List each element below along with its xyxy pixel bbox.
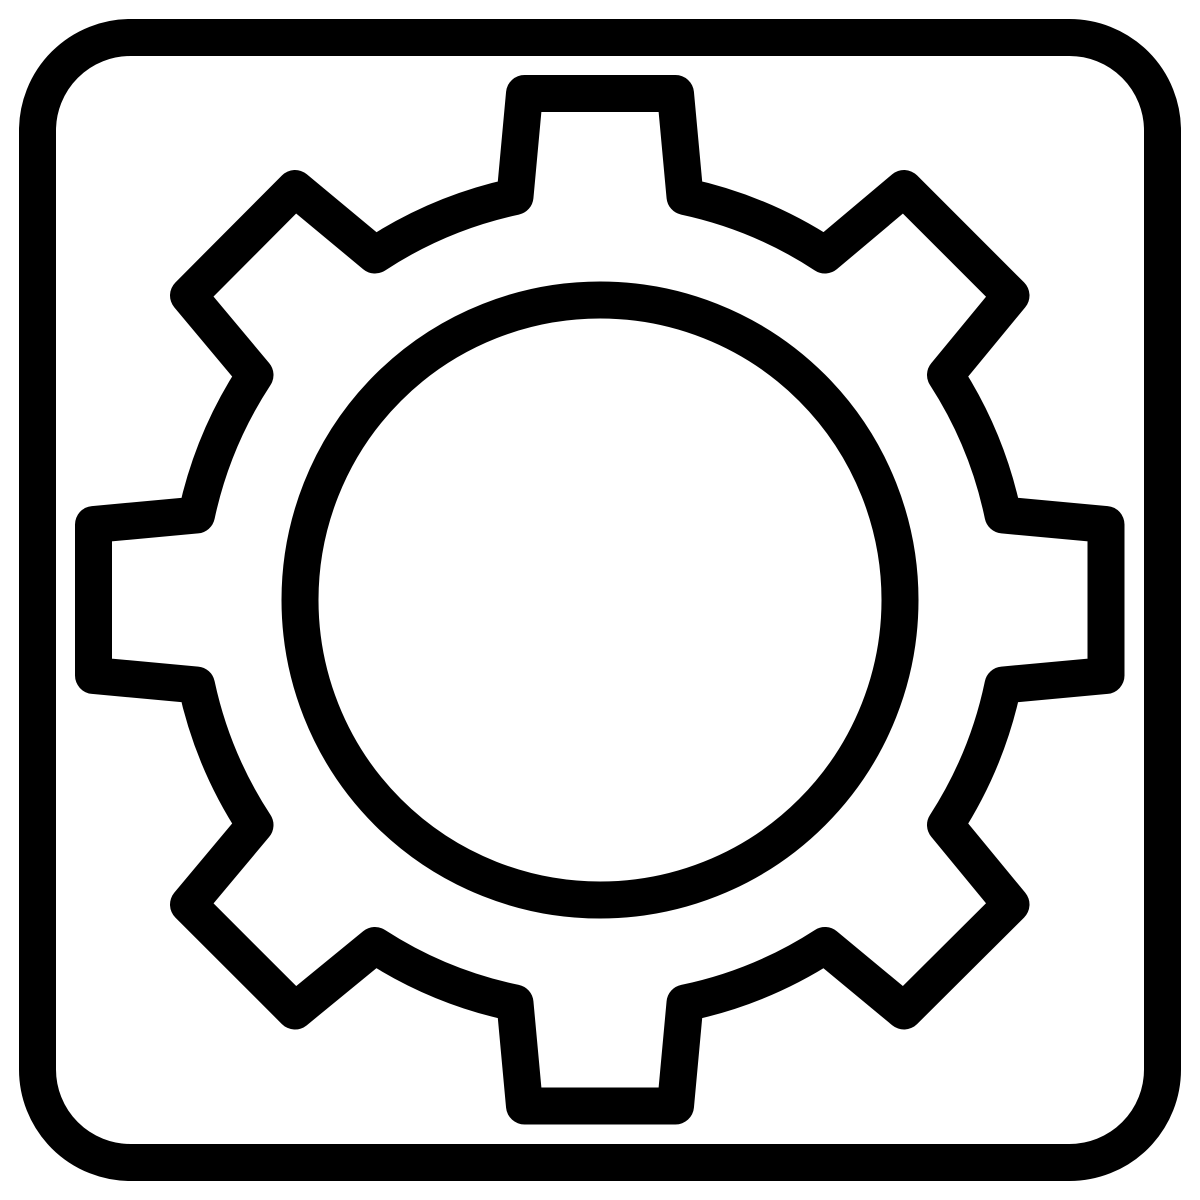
gear outline: [94, 94, 1106, 1106]
centre circle: [300, 300, 900, 900]
